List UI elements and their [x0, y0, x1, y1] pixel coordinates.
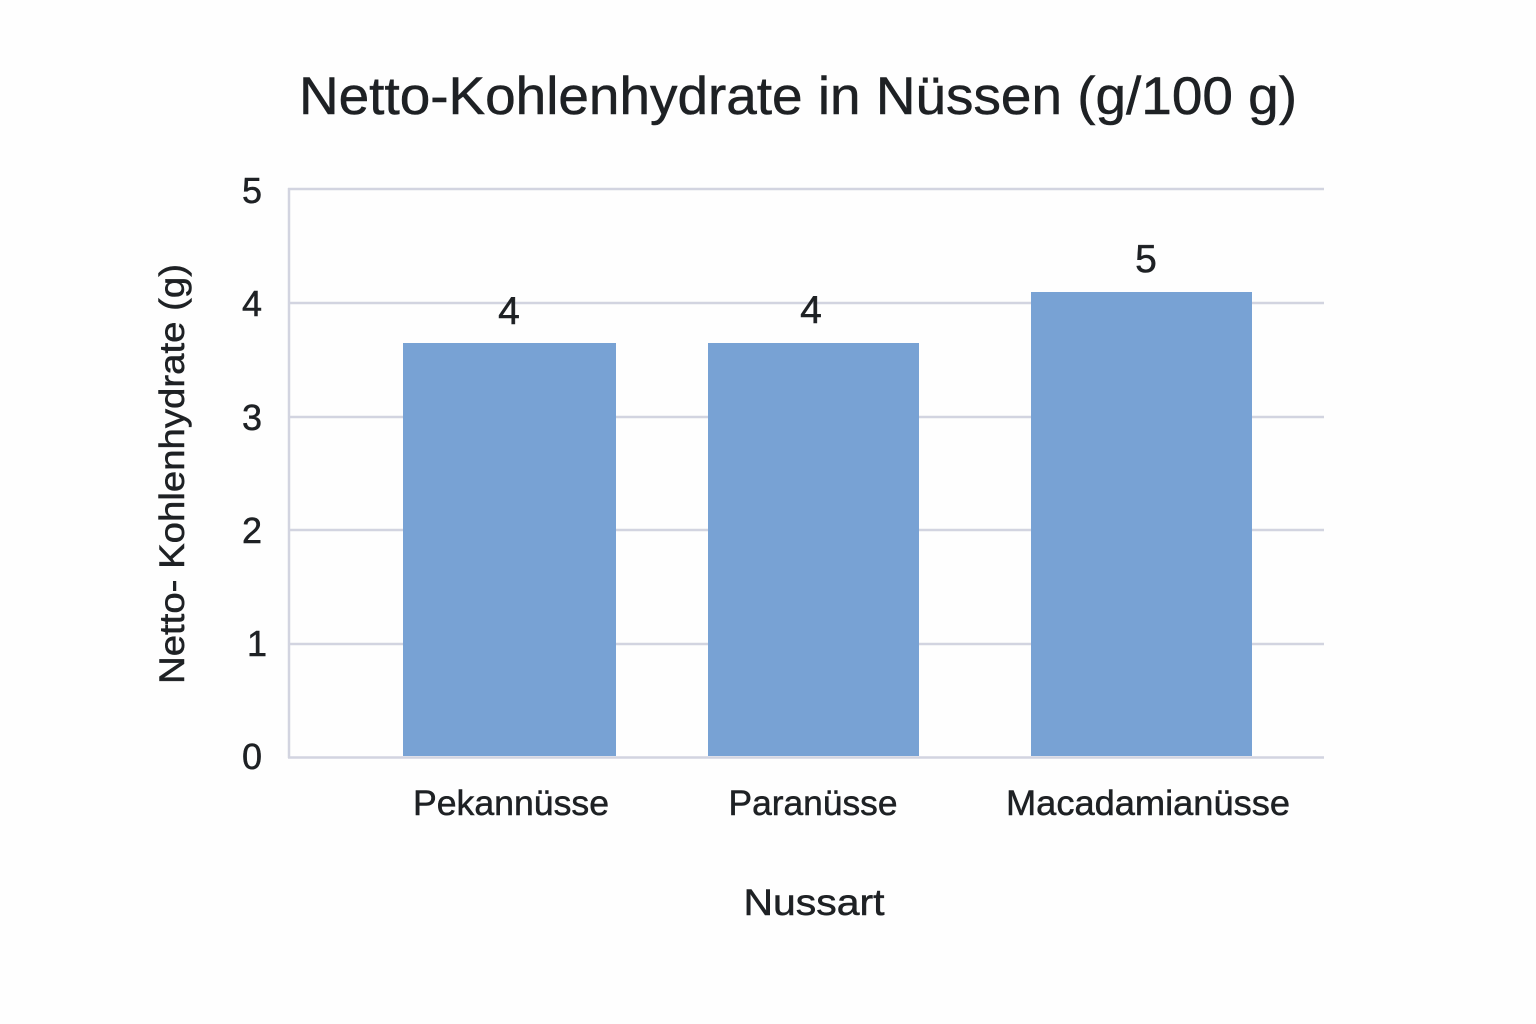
bar: Pekannüsse — [403, 343, 616, 756]
category labels: Paranüsse — [728, 784, 898, 823]
title: Netto-Kohlenhydrate in Nüssen (g/100 g) — [299, 67, 1297, 126]
category labels — [413, 784, 1290, 823]
y axis tick labels: 2 — [242, 510, 262, 551]
value labels: 5 — [1135, 238, 1157, 281]
category labels: Pekannüsse — [413, 784, 609, 823]
y axis tick labels: 5 — [242, 170, 262, 211]
category labels: Macadamianüsse — [1006, 784, 1290, 823]
bar chart — [153, 170, 1324, 923]
value labels: 4 — [498, 290, 520, 333]
value labels — [498, 238, 1157, 333]
y axis tick labels: 4 — [242, 283, 262, 324]
bar: Paranüsse — [708, 343, 919, 756]
y axis tick labels: 1 — [247, 623, 267, 664]
y axis tick labels — [242, 170, 267, 777]
y axis tick labels: 3 — [242, 397, 262, 438]
y axis title: Netto- Kohlenhydrate (g) — [153, 264, 192, 684]
bar: Macadamianüsse — [1031, 292, 1252, 756]
y axis tick labels: 0 — [242, 736, 262, 777]
value labels: 4 — [800, 289, 822, 332]
x axis title: Nussart — [744, 882, 885, 923]
